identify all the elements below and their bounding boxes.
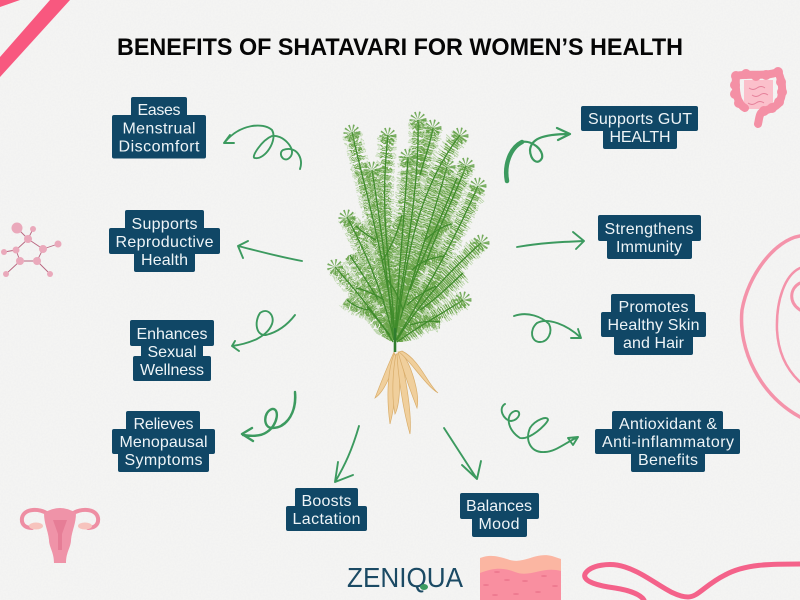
- label: Balances Mood: Mood: [478, 516, 520, 533]
- label: Supports GUT Health: [581, 106, 698, 149]
- arrow: to Balances Mood: [444, 428, 481, 479]
- arrow: to Boosts Lactation: [335, 426, 359, 482]
- label: Relieves Menopausal Symptoms: Symptoms: [124, 452, 202, 469]
- label: Supports GUT Health: Supports GUT: [588, 111, 692, 128]
- arrow: thick start of Supports GUT Health: [506, 142, 522, 181]
- arrow: to Eases Menstrual Discomfort: [224, 126, 301, 169]
- arrow: to Supports GUT Health: [506, 128, 570, 181]
- label: Supports GUT Health: HEALTH: [610, 129, 670, 146]
- icon: skin layers: [480, 555, 561, 600]
- label: Eases Menstrual Discomfort: Menstrual: [122, 120, 196, 138]
- label: Eases Menstrual Discomfort: Discomfort: [118, 138, 200, 156]
- arrow: to Antioxidant and Anti-inflammatory Benefits: [502, 404, 578, 452]
- logo: ZENIQUA: [347, 562, 463, 593]
- label: Strengthens Immunity: [598, 215, 701, 259]
- tip tufts: [331, 116, 486, 304]
- arrow: to Promotes Healthy Skin and Hair: [514, 314, 581, 342]
- arrow: to Supports Reproductive Health: [238, 241, 302, 261]
- arrow: to Strengthens Immunity: [517, 232, 584, 249]
- label: Supports Reproductive Health: Health: [141, 252, 188, 269]
- label: Enhances Sexual Wellness: [130, 320, 214, 381]
- label: Relieves Menopausal Symptoms: Relieves: [134, 416, 194, 433]
- label: Boosts Lactation: Lactation: [292, 511, 360, 528]
- label: Promotes Healthy Skin and Hair: Healthy Skin: [608, 317, 700, 334]
- label: Relieves Menopausal Symptoms: Menopausal: [120, 434, 208, 451]
- stems: [335, 120, 481, 342]
- label: Antioxidant and Anti-inflammatory Benefits: [595, 411, 740, 472]
- arrow: to Relieves Menopausal Symptoms: [242, 392, 295, 441]
- label: Promotes Healthy Skin and Hair: and Hair: [623, 335, 685, 352]
- label: Promotes Healthy Skin and Hair: Promotes: [618, 299, 688, 316]
- label: Strengthens Immunity: Strengthens: [604, 221, 694, 238]
- foliage: [335, 120, 481, 342]
- icon: female reproductive system: [22, 508, 98, 563]
- label: Enhances Sexual Wellness: Wellness: [140, 362, 204, 379]
- ribbon: bottom-right pink: [585, 564, 800, 600]
- title: BENEFITS OF SHATAVARI FOR WOMEN’S HEALTH: [117, 34, 683, 61]
- ribbon: top-left pink: [0, 0, 70, 77]
- label: Supports Reproductive Health: Reproductive: [116, 234, 214, 251]
- label: Boosts Lactation: Boosts: [302, 493, 352, 510]
- label: Enhances Sexual Wellness: Sexual: [148, 344, 196, 361]
- label: Enhances Sexual Wellness: Enhances: [136, 326, 208, 343]
- label: Boosts Lactation: [286, 488, 367, 531]
- label: Eases Menstrual Discomfort: Eases: [138, 102, 180, 119]
- roots: [375, 351, 438, 434]
- label: Balances Mood: Balances: [466, 498, 532, 515]
- arrow: to Enhances Sexual Wellness: [232, 311, 295, 351]
- plant illustration: [331, 116, 486, 434]
- label: Antioxidant and Anti-inflammatory Benefits: Benefits: [638, 452, 698, 469]
- label: Strengthens Immunity: Immunity: [616, 239, 682, 256]
- label: Supports Reproductive Health: [109, 210, 220, 272]
- label: Antioxidant and Anti-inflammatory Benefits: Anti-inflammatory: [602, 434, 734, 451]
- icon: molecule: [1, 222, 62, 277]
- label: Relieves Menopausal Symptoms: [112, 411, 215, 472]
- label: Balances Mood: [460, 493, 539, 537]
- label: Supports Reproductive Health: Supports: [132, 216, 198, 233]
- label: Eases Menstrual Discomfort: [112, 97, 206, 158]
- label: Promotes Healthy Skin and Hair: [601, 294, 706, 355]
- label: Antioxidant and Anti-inflammatory Benefits: Antioxidant &: [619, 416, 717, 433]
- decorative spiral: right side: [742, 236, 800, 417]
- icon: intestines: [730, 67, 787, 124]
